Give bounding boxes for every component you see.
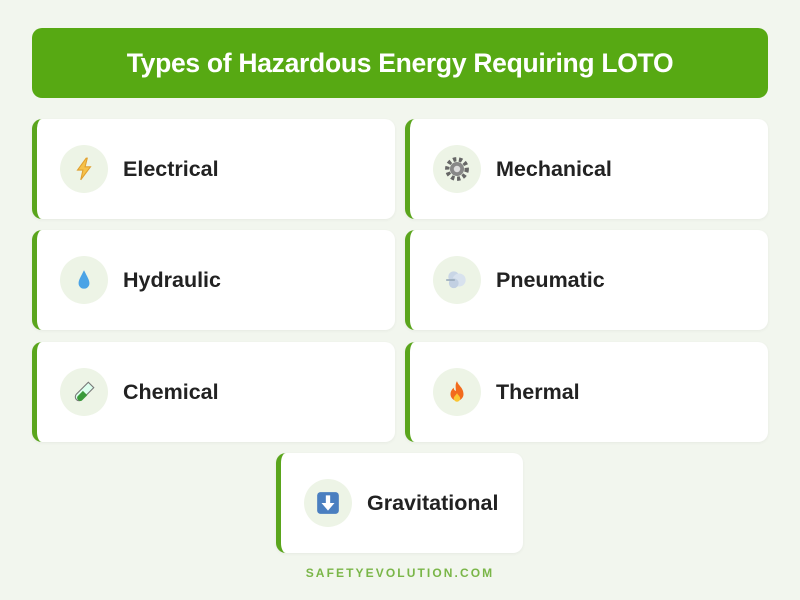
label: Mechanical xyxy=(496,157,612,181)
icon: water drop xyxy=(60,256,108,304)
card: electrical xyxy=(32,119,395,219)
icon: gear xyxy=(433,145,481,193)
label: Electrical xyxy=(123,157,219,181)
icon: lightning xyxy=(60,145,108,193)
card: chemical xyxy=(32,342,395,442)
label: Gravitational xyxy=(367,491,498,515)
title: Types of Hazardous Energy Requiring LOTO xyxy=(127,48,673,78)
card: mechanical xyxy=(405,119,768,219)
icon: test tube xyxy=(60,368,108,416)
label: Chemical xyxy=(123,380,219,404)
label: Hydraulic xyxy=(123,268,221,292)
footer: SAFETYEVOLUTION.COM xyxy=(306,566,494,580)
card: thermal xyxy=(405,342,768,442)
title xyxy=(32,28,768,98)
label: Pneumatic xyxy=(496,268,605,292)
icon: air puff xyxy=(433,256,481,304)
icon: fire xyxy=(433,368,481,416)
label: Thermal xyxy=(496,380,580,404)
card: gravitational xyxy=(276,453,523,553)
card: hydraulic xyxy=(32,230,395,330)
icon: down arrow xyxy=(304,479,352,527)
card: pneumatic xyxy=(405,230,768,330)
